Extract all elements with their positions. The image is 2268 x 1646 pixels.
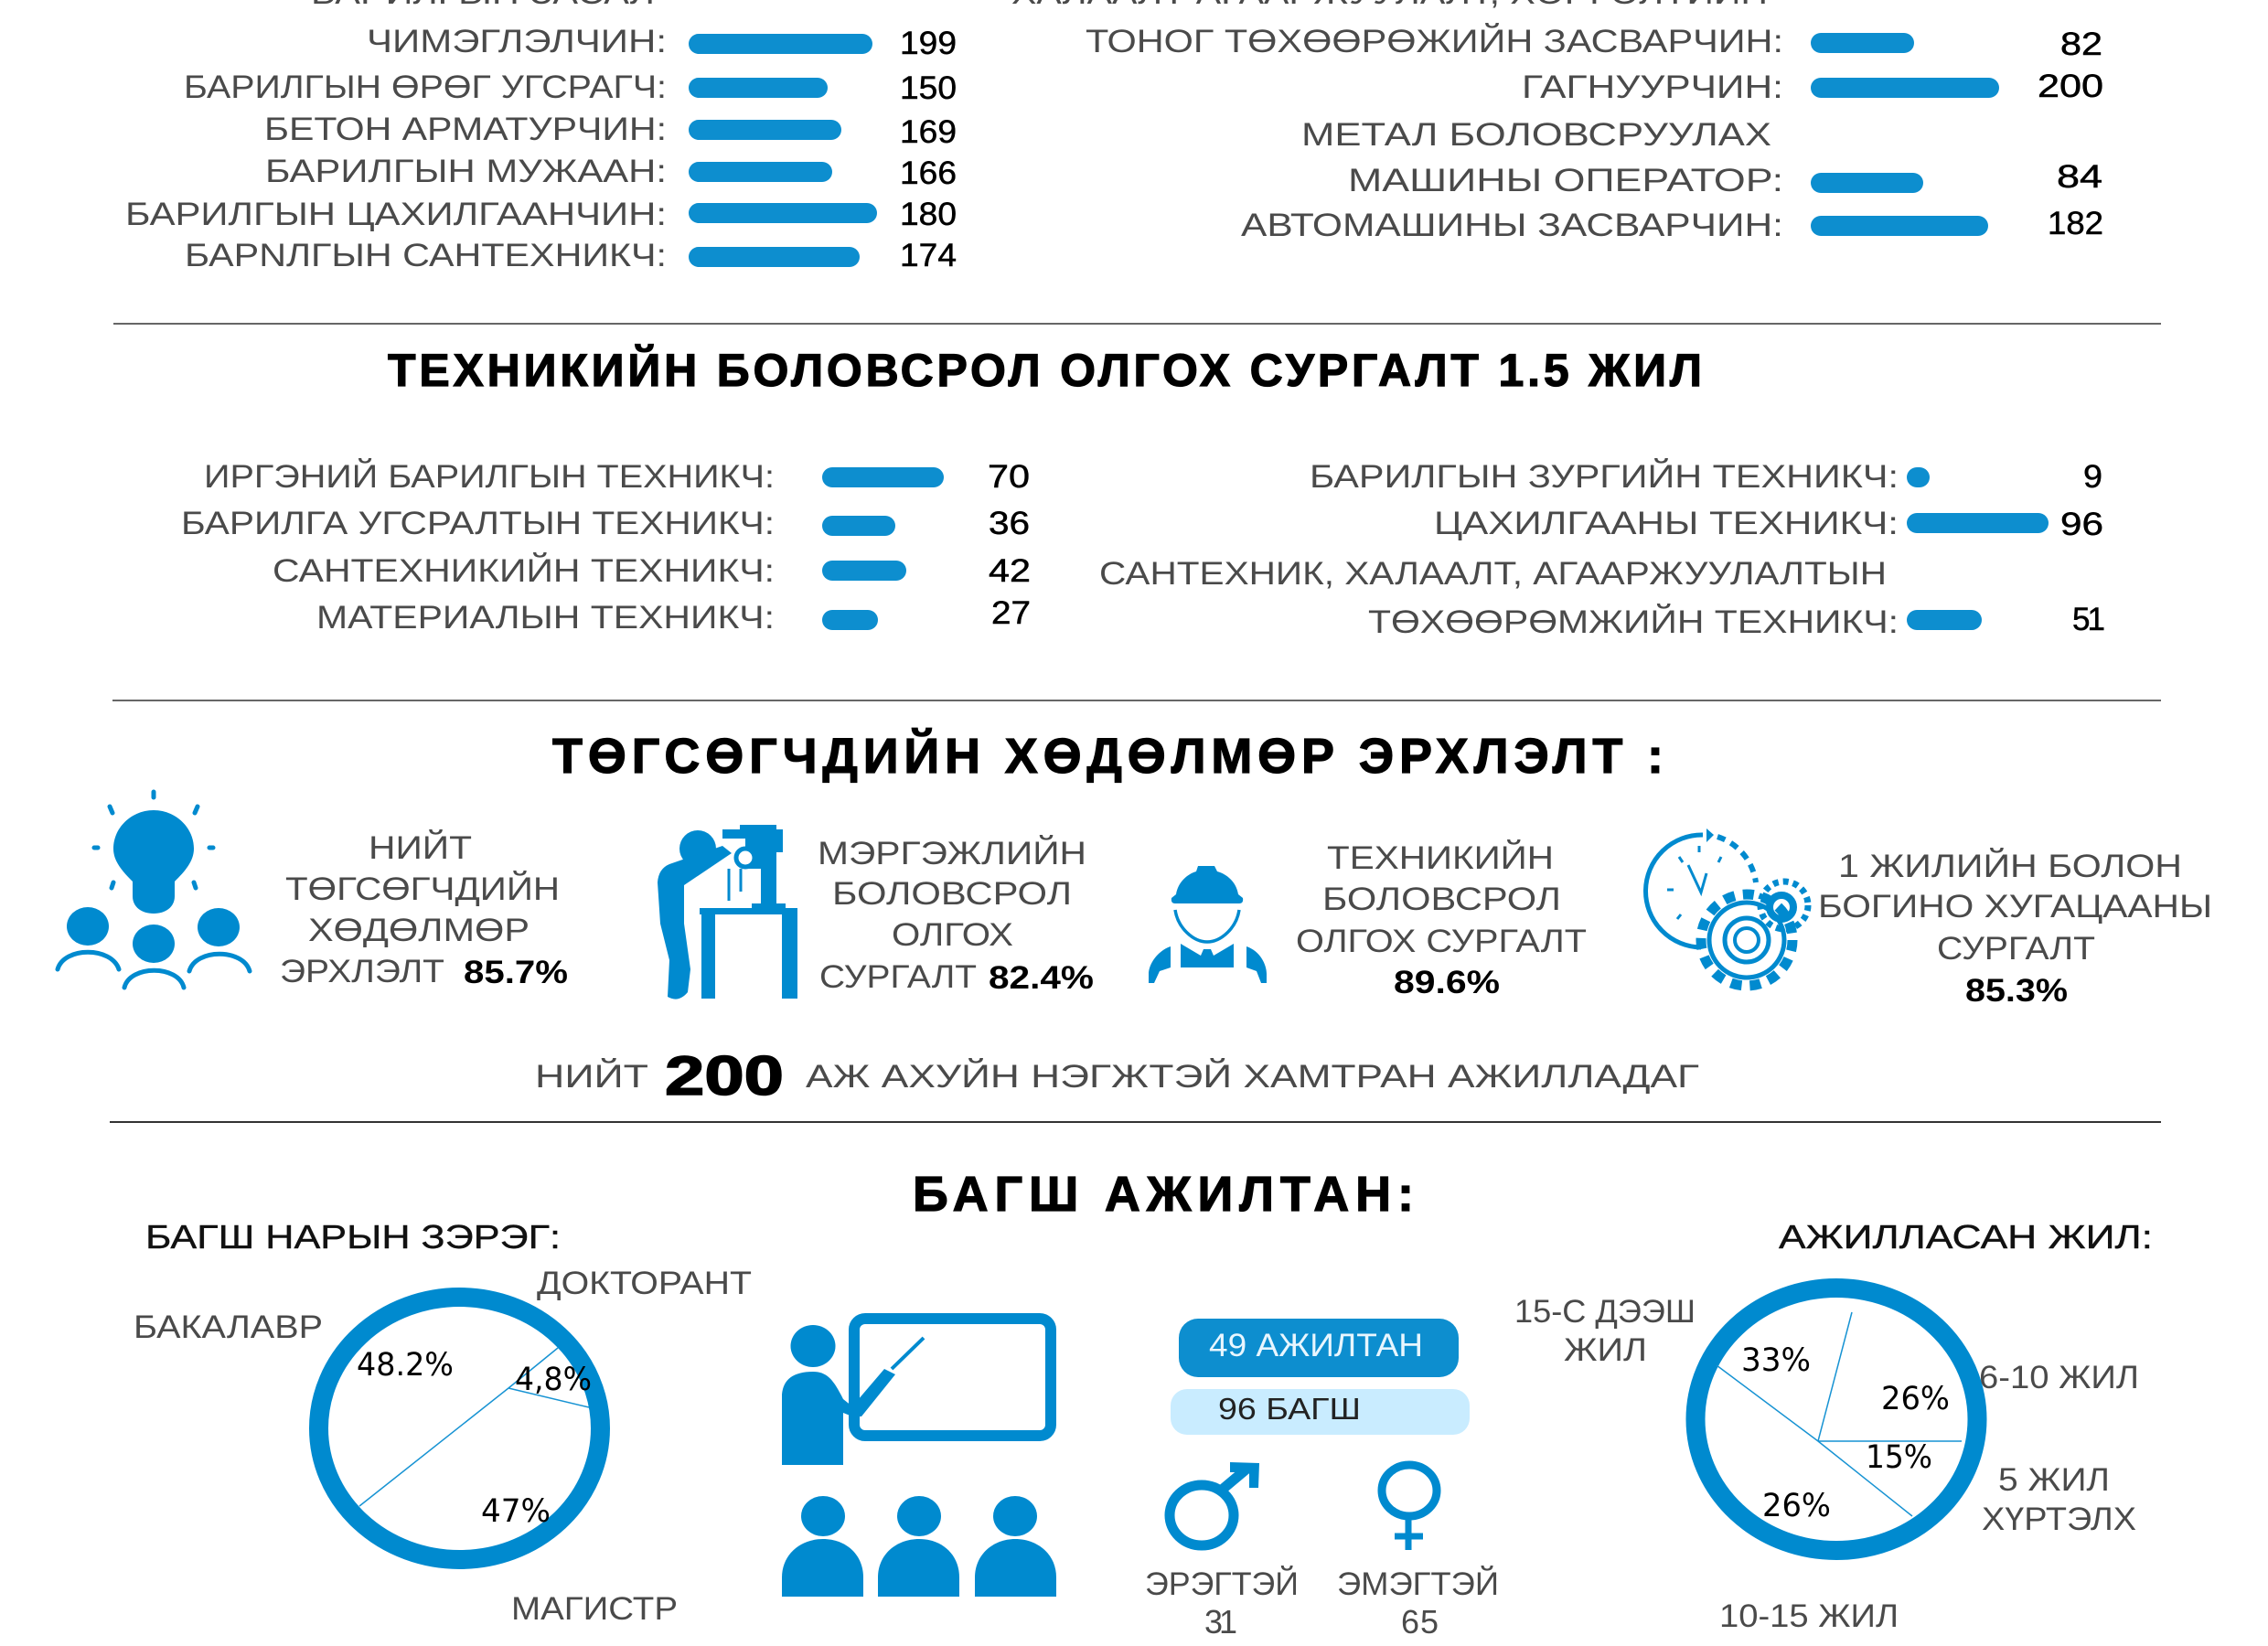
row: ЧИМЭГЛЭЛЧИН 199 — [367, 24, 957, 61]
label: female count: ЭМЭГТЭЙ — [1337, 1566, 1499, 1602]
text: 200 partner organisations: АЖ АХУЙН НЭГЖТЭЙ ХАМТРАН АЖИЛЛАДАГ — [806, 1058, 1699, 1095]
text: short-term training employment 85.3%: 85.3% — [1965, 973, 2068, 1009]
row: ТОНОГ ТӨХӨӨРӨЖИЙН ЗАСВАРЧИН 82: ТОНОГ ТӨХӨӨРӨЖИЙН ЗАСВАРЧИН: — [1086, 23, 1783, 59]
icon: female symbol — [1382, 1465, 1437, 1550]
label: male count — [1145, 1566, 1299, 1641]
row: БАРИЛГА УГСРАЛТЫН ТЕХНИКЧ 36: 36 — [989, 506, 1030, 541]
row: МЕТАЛ БОЛОВСРУУЛАХ МАШИНЫ ОПЕРАТОР 84 — [1301, 117, 2102, 198]
icon: worker at drill press — [658, 825, 797, 999]
text: overall employment 85.7%: ХӨДӨЛМӨР — [308, 913, 530, 948]
text: short-term training employment 85.3%: 1 ЖИЛИЙН БОЛОН — [1838, 848, 2182, 884]
row: ЧИМЭГЛЭЛЧИН 199: 199 — [900, 26, 957, 61]
text: 200 partner organisations: НИЙТ — [535, 1058, 648, 1095]
text: short-term training employment 85.3%: СУРГАЛТ — [1937, 931, 2095, 967]
label: female count — [1337, 1566, 1499, 1641]
text: short-term training employment 85.3%: БОГИНО ХУГАЦААНЫ — [1818, 889, 2212, 925]
row: МЕТАЛ БОЛОВСРУУЛАХ МАШИНЫ ОПЕРАТОР 84: 84 — [2057, 159, 2102, 195]
row: БАРИЛГЫН ӨРӨГ УГСРАГЧ 150: 150 — [900, 70, 957, 106]
label: female count: 65 — [1401, 1603, 1439, 1641]
row: БАРИЛГЫН МУЖААН 166 — [265, 154, 957, 191]
row: БЕТОН АРМАТУРЧИН 169: 169 — [900, 114, 957, 150]
label: male count: 31 — [1204, 1603, 1237, 1641]
text: 200 partner organisations — [535, 1045, 1699, 1106]
row: ЦАХИЛГААНЫ ТЕХНИКЧ 96: ЦАХИЛГААНЫ ТЕХНИКЧ: — [1434, 506, 1899, 541]
row: БАРИЛГЫН ЗУРГИЙН ТЕХНИКЧ 9: БАРИЛГЫН ЗУРГИЙН ТЕХНИКЧ: — [1310, 458, 1899, 495]
row: ИРГЭНИЙ БАРИЛГЫН ТЕХНИКЧ 70: 70 — [988, 459, 1030, 495]
text: vocational employment 82.4% — [818, 835, 1094, 996]
row: САНТЕХНИК, ХАЛААЛТ, АГААРЖУУЛАЛТЫН ТӨХӨӨРӨМЖИЙН ТЕХНИКЧ 51 — [1099, 556, 2105, 640]
row: САНТЕХНИК, ХАЛААЛТ, АГААРЖУУЛАЛТЫН ТӨХӨӨРӨМЖИЙН ТЕХНИКЧ 51: 51 — [2072, 602, 2105, 637]
row: ТОНОГ ТӨХӨӨРӨЖИЙН ЗАСВАРЧИН 82: 82 — [2060, 27, 2102, 62]
row: БАРNЛГЫН САНТЕХНИКЧ 174: БАРNЛГЫН САНТЕХНИКЧ: — [185, 238, 667, 273]
row: БАРИЛГЫН МУЖААН 166: 166 — [900, 155, 957, 191]
pie chart: years worked: 15% — [1866, 1439, 1932, 1476]
row: БАРИЛГЫН ЗУРГИЙН ТЕХНИКЧ 9: 9 — [2083, 459, 2102, 495]
row: ТОНОГ ТӨХӨӨРӨЖИЙН ЗАСВАРЧИН 82 — [1086, 23, 2102, 62]
text: vocational employment 82.4%: СУРГАЛТ — [819, 959, 977, 995]
heading: graduate employment: ТӨГСӨГЧДИЙН ХӨДӨЛМӨР ЭРХЛЭЛТ : — [552, 728, 1664, 784]
icon: teacher at board — [782, 1319, 1051, 1465]
text: overall employment 85.7% — [280, 829, 568, 990]
pie chart: years worked: 26% — [1881, 1381, 1950, 1417]
pie chart: years worked: 6-10 ЖИЛ — [1979, 1360, 2139, 1395]
pie chart: years worked: ХҮРТЭЛХ — [1982, 1502, 2136, 1537]
pie chart: years worked: 26% — [1762, 1488, 1831, 1524]
subheading: teacher degrees: БАГШ НАРЫН ЗЭРЭГ: — [145, 1218, 561, 1256]
row: ЧИМЭГЛЭЛЧИН 199: ЧИМЭГЛЭЛЧИН: — [367, 24, 667, 59]
icon: engineer with helmet — [1149, 866, 1267, 983]
row: АВТОМАШИНЫ ЗАСВАРЧИН 182 — [1241, 206, 2103, 243]
row: САНТЕХНИКИЙН ТЕХНИКЧ 42 — [273, 552, 1031, 589]
row: БАРИЛГЫН МУЖААН 166: БАРИЛГЫН МУЖААН: — [265, 154, 667, 189]
icon: male symbol — [1170, 1462, 1259, 1545]
pie chart: teacher degrees: ДОКТОРАНТ — [537, 1266, 752, 1301]
pie chart: teacher degrees: 48.2% — [357, 1347, 454, 1384]
row: БЕТОН АРМАТУРЧИН 169 — [264, 112, 957, 150]
text: overall employment 85.7%: ТӨГСӨГЧДИЙН — [285, 871, 560, 907]
row: БАРИЛГЫН ӨРӨГ УГСРАГЧ 150 — [184, 69, 957, 106]
pie chart: years worked: 5 ЖИЛ — [1998, 1462, 2110, 1498]
row: БАРИЛГА УГСРАЛТЫН ТЕХНИКЧ 36 — [181, 506, 1030, 541]
row: БАРИЛГЫН ЦАХИЛГААНЧИН 180 — [125, 197, 957, 232]
panel: vocational trades right bar chart — [1011, 0, 2103, 243]
row: ИРГЭНИЙ БАРИЛГЫН ТЕХНИКЧ 70 — [204, 458, 1030, 495]
icon: light bulb and people — [58, 792, 250, 988]
row: САНТЕХНИК, ХАЛААЛТ, АГААРЖУУЛАЛТЫН ТӨХӨӨРӨМЖИЙН ТЕХНИКЧ 51: САНТЕХНИК, ХАЛААЛТ, АГААРЖУУЛАЛТЫН — [1099, 556, 1887, 592]
pie chart: teacher degrees: 4,8% — [515, 1362, 592, 1398]
pie chart: teacher degrees: 47% — [481, 1493, 551, 1530]
pie chart: teacher degrees: БАКАЛАВР — [134, 1309, 323, 1345]
pill: 96 teachers — [1171, 1389, 1470, 1435]
text: overall employment 85.7%: НИЙТ — [369, 829, 472, 866]
row: МЕТАЛ БОЛОВСРУУЛАХ МАШИНЫ ОПЕРАТОР 84: МАШИНЫ ОПЕРАТОР: — [1348, 163, 1783, 198]
row: БАРИЛГА УГСРАЛТЫН ТЕХНИКЧ 36: БАРИЛГА УГСРАЛТЫН ТЕХНИКЧ: — [181, 506, 775, 541]
panel: technical education right bar chart — [1099, 458, 2105, 640]
pill: 49 staff — [1179, 1319, 1459, 1377]
row: БАРNЛГЫН САНТЕХНИКЧ 174 — [185, 238, 957, 273]
pie chart: teacher degrees: МАГИСТР — [511, 1591, 678, 1627]
row: ИРГЭНИЙ БАРИЛГЫН ТЕХНИКЧ 70: ИРГЭНИЙ БАРИЛГЫН ТЕХНИКЧ: — [204, 458, 775, 495]
row: БАРИЛГЫН ЦАХИЛГААНЧИН 180: 180 — [900, 197, 957, 232]
row: БАРИЛГЫН ӨРӨГ УГСРАГЧ 150: БАРИЛГЫН ӨРӨГ УГСРАГЧ: — [184, 69, 667, 105]
icon: clock and gears — [1645, 828, 1808, 986]
text: vocational employment 82.4%: ОЛГОХ — [892, 917, 1013, 953]
row: ЦАХИЛГААНЫ ТЕХНИКЧ 96 — [1434, 506, 2103, 542]
pie chart: teacher degrees — [134, 1266, 752, 1627]
row: БАРNЛГЫН САНТЕХНИКЧ 174: 174 — [900, 238, 957, 273]
text: 200 partner organisations: 200 — [665, 1045, 784, 1106]
text: vocational employment 82.4%: БОЛОВСРОЛ — [832, 876, 1072, 912]
text: technical employment 89.6% — [1296, 839, 1587, 1000]
row: ЦАХИЛГААНЫ ТЕХНИКЧ 96: 96 — [2060, 507, 2103, 542]
heading: technical education: ТЕХНИКИЙН БОЛОВСРОЛ ОЛГОХ СУРГАЛТ 1.5 ЖИЛ — [388, 344, 1702, 396]
row: БАРИЛГЫН ЦАХИЛГААНЧИН 180: БАРИЛГЫН ЦАХИЛГААНЧИН: — [125, 197, 667, 232]
panel: vocational trades left bar chart — [125, 0, 957, 273]
text: technical employment 89.6%: ТЕХНИКИЙН — [1327, 839, 1554, 876]
pie chart: years worked — [1514, 1288, 2139, 1634]
row: АВТОМАШИНЫ ЗАСВАРЧИН 182: 182 — [2048, 206, 2103, 241]
subheading: years worked: АЖИЛЛАСАН ЖИЛ: — [1779, 1218, 2153, 1256]
row: БЕТОН АРМАТУРЧИН 169: БЕТОН АРМАТУРЧИН: — [264, 112, 667, 147]
label: male count: ЭРЭГТЭЙ — [1145, 1566, 1299, 1602]
text: technical employment 89.6%: ОЛГОХ СУРГАЛТ — [1296, 924, 1587, 959]
heading: staff: БАГШ АЖИЛТАН: — [913, 1167, 1414, 1222]
text: technical employment 89.6%: 89.6% — [1394, 965, 1500, 1000]
row: ГАГНУУРЧИН 200 — [1522, 69, 2103, 105]
row: МАТЕРИАЛЫН ТЕХНИКЧ 27: МАТЕРИАЛЫН ТЕХНИКЧ: — [316, 600, 775, 636]
pie chart: years worked: ЖИЛ — [1564, 1332, 1647, 1368]
row: ГАГНУУРЧИН 200: 200 — [2038, 69, 2103, 104]
row: МЕТАЛ БОЛОВСРУУЛАХ МАШИНЫ ОПЕРАТОР 84: МЕТАЛ БОЛОВСРУУЛАХ — [1301, 117, 1771, 153]
row: МАТЕРИАЛЫН ТЕХНИКЧ 27: 27 — [991, 595, 1031, 631]
text: technical employment 89.6%: БОЛОВСРОЛ — [1322, 882, 1561, 917]
text: short-term training employment 85.3% — [1818, 848, 2212, 1009]
row: САНТЕХНИК, ХАЛААЛТ, АГААРЖУУЛАЛТЫН ТӨХӨӨРӨМЖИЙН ТЕХНИКЧ 51: ТӨХӨӨРӨМЖИЙН ТЕХНИКЧ: — [1368, 604, 1899, 640]
row: САНТЕХНИКИЙН ТЕХНИКЧ 42: 42 — [989, 553, 1031, 589]
row: АВТОМАШИНЫ ЗАСВАРЧИН 182: АВТОМАШИНЫ ЗАСВАРЧИН: — [1241, 208, 1783, 243]
row: МАТЕРИАЛЫН ТЕХНИКЧ 27 — [316, 595, 1031, 636]
text: overall employment 85.7%: 85.7% — [464, 955, 568, 990]
icon: three students — [782, 1496, 1056, 1597]
pie chart: years worked: 33% — [1741, 1342, 1811, 1379]
text: overall employment 85.7%: ЭРХЛЭЛТ — [280, 954, 444, 989]
text: vocational employment 82.4%: МЭРГЭЖЛИЙН — [818, 835, 1086, 871]
row: ГАГНУУРЧИН 200: ГАГНУУРЧИН: — [1522, 69, 1783, 105]
pie chart: years worked: 10-15 ЖИЛ — [1719, 1598, 1899, 1634]
pill: 96 teachers: 96 БАГШ — [1218, 1392, 1361, 1426]
pie chart: years worked: 15-С ДЭЭШ — [1514, 1294, 1696, 1330]
panel: technical education left bar chart — [181, 458, 1031, 636]
row: БАРИЛГЫН ЗУРГИЙН ТЕХНИКЧ 9 — [1310, 458, 2102, 495]
text: vocational employment 82.4%: 82.4% — [989, 960, 1094, 996]
pill: 49 staff: 49 АЖИЛТАН — [1209, 1328, 1423, 1363]
row: САНТЕХНИКИЙН ТЕХНИКЧ 42: САНТЕХНИКИЙН ТЕХНИКЧ: — [273, 552, 775, 589]
